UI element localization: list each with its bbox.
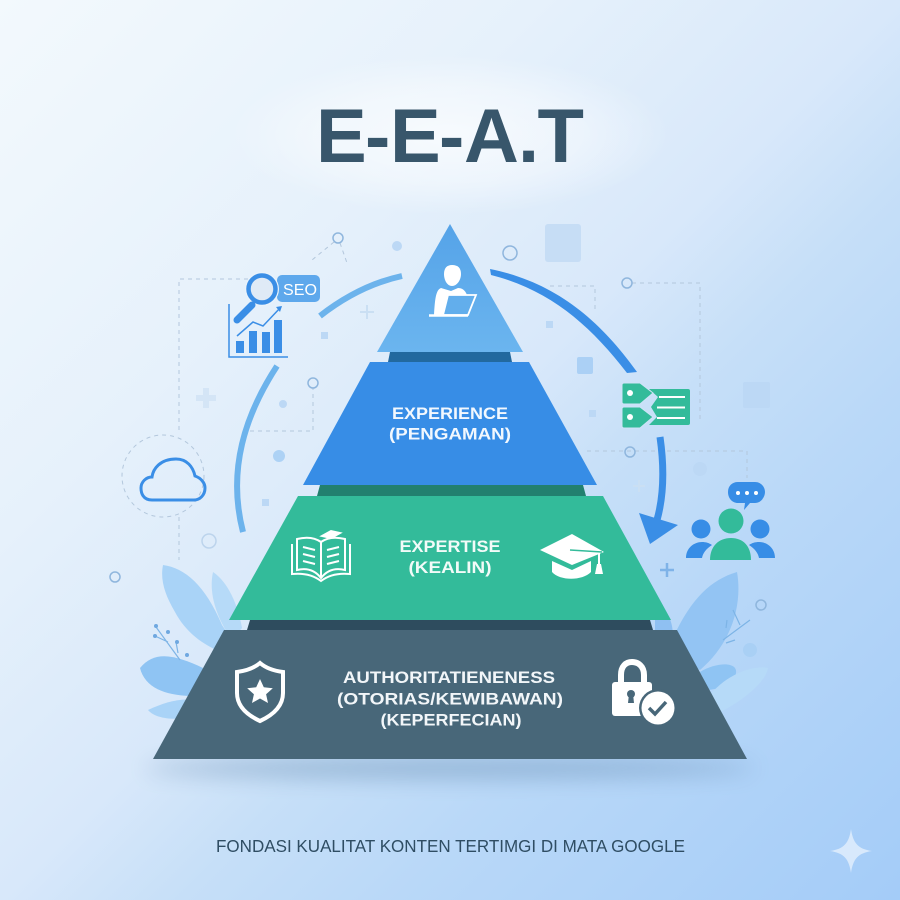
pyramid tier: Authoritativeness: [153, 630, 747, 759]
icon: cloud: [141, 459, 205, 500]
icon: sparkle: [830, 829, 872, 873]
icon: padlock with check badge: [612, 662, 677, 727]
band below Experience: [317, 485, 586, 496]
pyramid tier: Experience: EXPERIENCE: [392, 404, 508, 423]
left foliage: [140, 565, 245, 719]
pyramid tier: Experience: (PENGAMAN): [389, 424, 511, 444]
pyramid tier: Experience: [303, 362, 597, 485]
pyramid tier: Authoritativeness: AUTHORITATIENENESS: [343, 668, 555, 687]
icon: SEO magnifier and growth chart: [229, 272, 320, 357]
icon: person with laptop: [429, 265, 476, 316]
pyramid tier: Expertise: EXPERTISE: [400, 537, 500, 556]
icon: SEO magnifier and growth chart: SEO: [283, 282, 317, 299]
pyramid tier: Expertise: (KEALIN): [408, 558, 492, 577]
pyramid tier: Expertise: [229, 496, 671, 620]
title heading: E-E-A.T: [316, 94, 584, 179]
pyramid tier: top apex: [377, 224, 523, 352]
right foliage: [655, 572, 768, 712]
circular arrows around pyramid: [237, 269, 678, 544]
pyramid tier: Authoritativeness: (OTORIAS/KEWIBAWAN): [337, 690, 563, 708]
pyramid tier: Authoritativeness: (KEPERFECIAN): [380, 710, 522, 730]
band below Expertise: [247, 620, 653, 630]
pyramid shadow: [145, 758, 755, 778]
icon: graduation cap: [540, 534, 604, 579]
icon: open book: [292, 531, 350, 581]
band below apex: [388, 352, 512, 362]
background dashed connectors and decorative shapes: [110, 224, 770, 610]
icon: shield with star: [237, 663, 283, 721]
icon: green tags and list: [622, 383, 690, 428]
footer caption: FONDASI KUALITAT KONTEN TERTIMGI DI MATA GOOGLE: [216, 836, 685, 856]
icon: people with chat bubble: [686, 482, 775, 560]
